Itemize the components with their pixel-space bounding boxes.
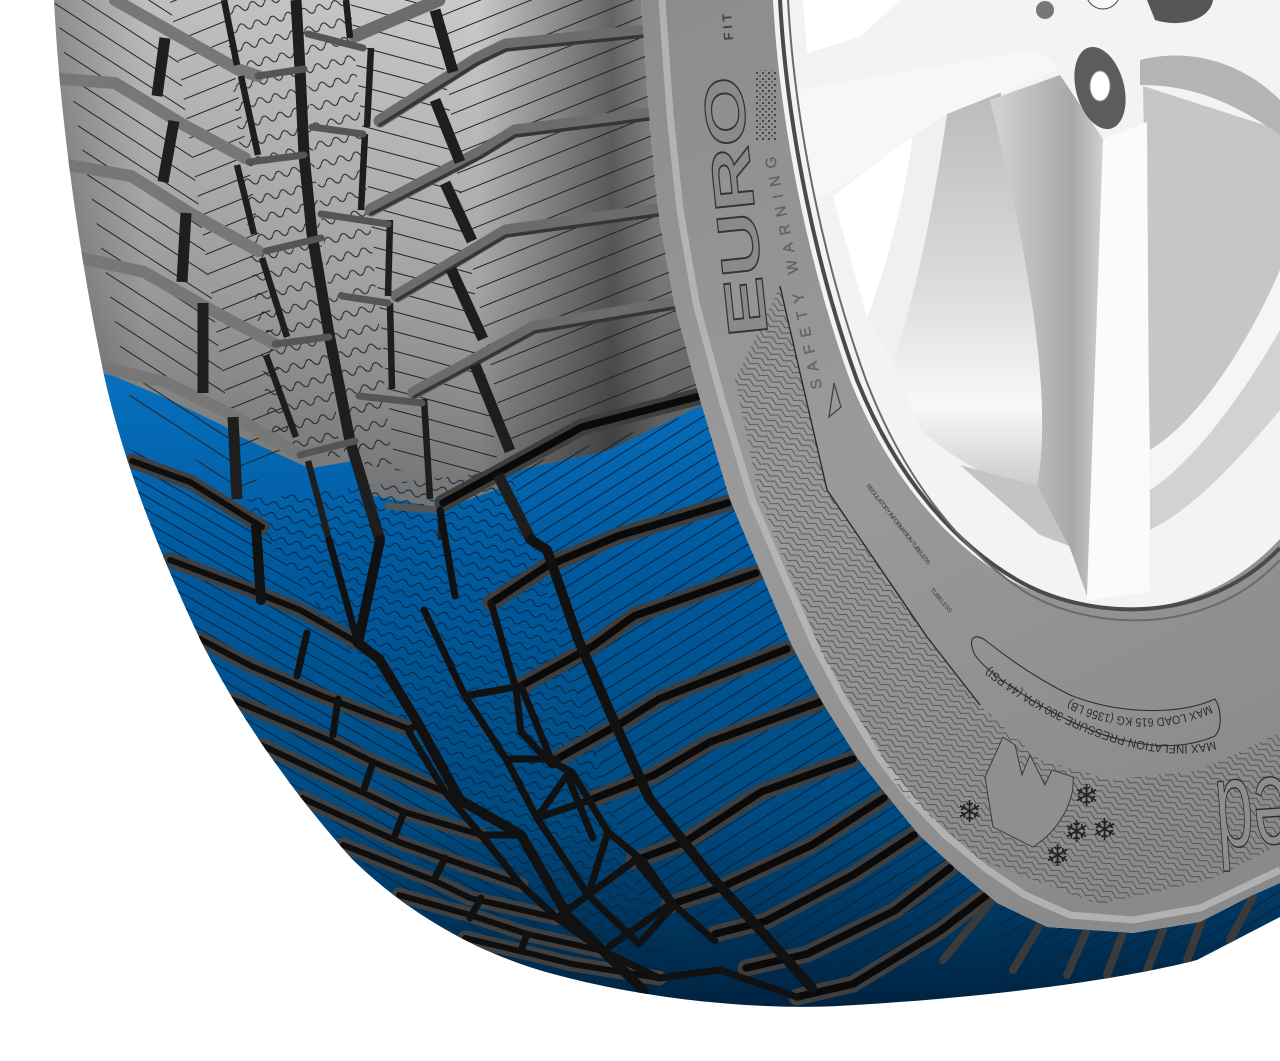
white arc band right (1150, 270, 1280, 490)
lip shadow patch (960, 465, 1075, 548)
inner barrel right (1143, 86, 1280, 450)
white window (833, 135, 913, 318)
alloy rim (773, 0, 1280, 609)
text: SAFETY WARNING: SAFETY WARNING (762, 155, 826, 391)
centre cross grooves upper (249, 34, 435, 510)
text: small regulatory lines: REGULATORY INFORMATION TUBELESS (864, 484, 931, 566)
vertical spoke (1087, 122, 1150, 600)
icon: warning triangle (829, 383, 841, 417)
left shoulder grooves (60, 0, 659, 978)
herringbone band (735, 286, 1280, 905)
text: EURO: EURO (690, 73, 780, 340)
inner band line (780, 286, 980, 705)
top recess (1147, 0, 1213, 23)
centre ring (1086, 0, 1120, 9)
spoke shadow (990, 75, 1103, 596)
wheel nut recess (1066, 41, 1134, 135)
label oval (972, 637, 1220, 746)
top-left recess (1036, 1, 1054, 19)
blue highlighted tread zone (103, 372, 1280, 1007)
speckled marking block (755, 70, 777, 140)
tyre shoulder highlight (662, 0, 1280, 920)
barrel light band (867, 114, 947, 360)
icon: snow paw prints: ❄ (1064, 816, 1089, 849)
icon: snow paw prints: ❄ (957, 796, 982, 829)
right shoulder grooves (355, 0, 1253, 997)
text: small regulatory lines 2: TUBELESS (928, 587, 952, 614)
text: small marks: F I T (719, 13, 736, 41)
icon: snow paw prints: ❄ (1092, 814, 1117, 847)
upper spoke (797, 49, 1060, 204)
gray arc band right (1150, 330, 1280, 530)
icon: hand (985, 737, 1073, 847)
bottom band separators (943, 897, 1253, 975)
central circumferential grooves upper (157, 0, 531, 540)
rim seat dark lines (780, 0, 1280, 609)
sidewall (641, 0, 1280, 933)
inner barrel left (893, 90, 1043, 486)
top white gap (803, 0, 900, 53)
icon: snow paw prints (957, 780, 1117, 873)
text paths (985, 664, 1215, 745)
icon: snow paw prints: ❄ (1074, 780, 1099, 813)
central grooves lower (256, 510, 812, 997)
text: max load: MAX LOAD 615 KG (1356 LB) (1068, 698, 1212, 727)
icon: snow paw prints: ❄ (1045, 840, 1070, 873)
text: max inflation pressure: MAX INFLATION PRESSURE 300 KPA (44 PSI) (986, 666, 1216, 754)
